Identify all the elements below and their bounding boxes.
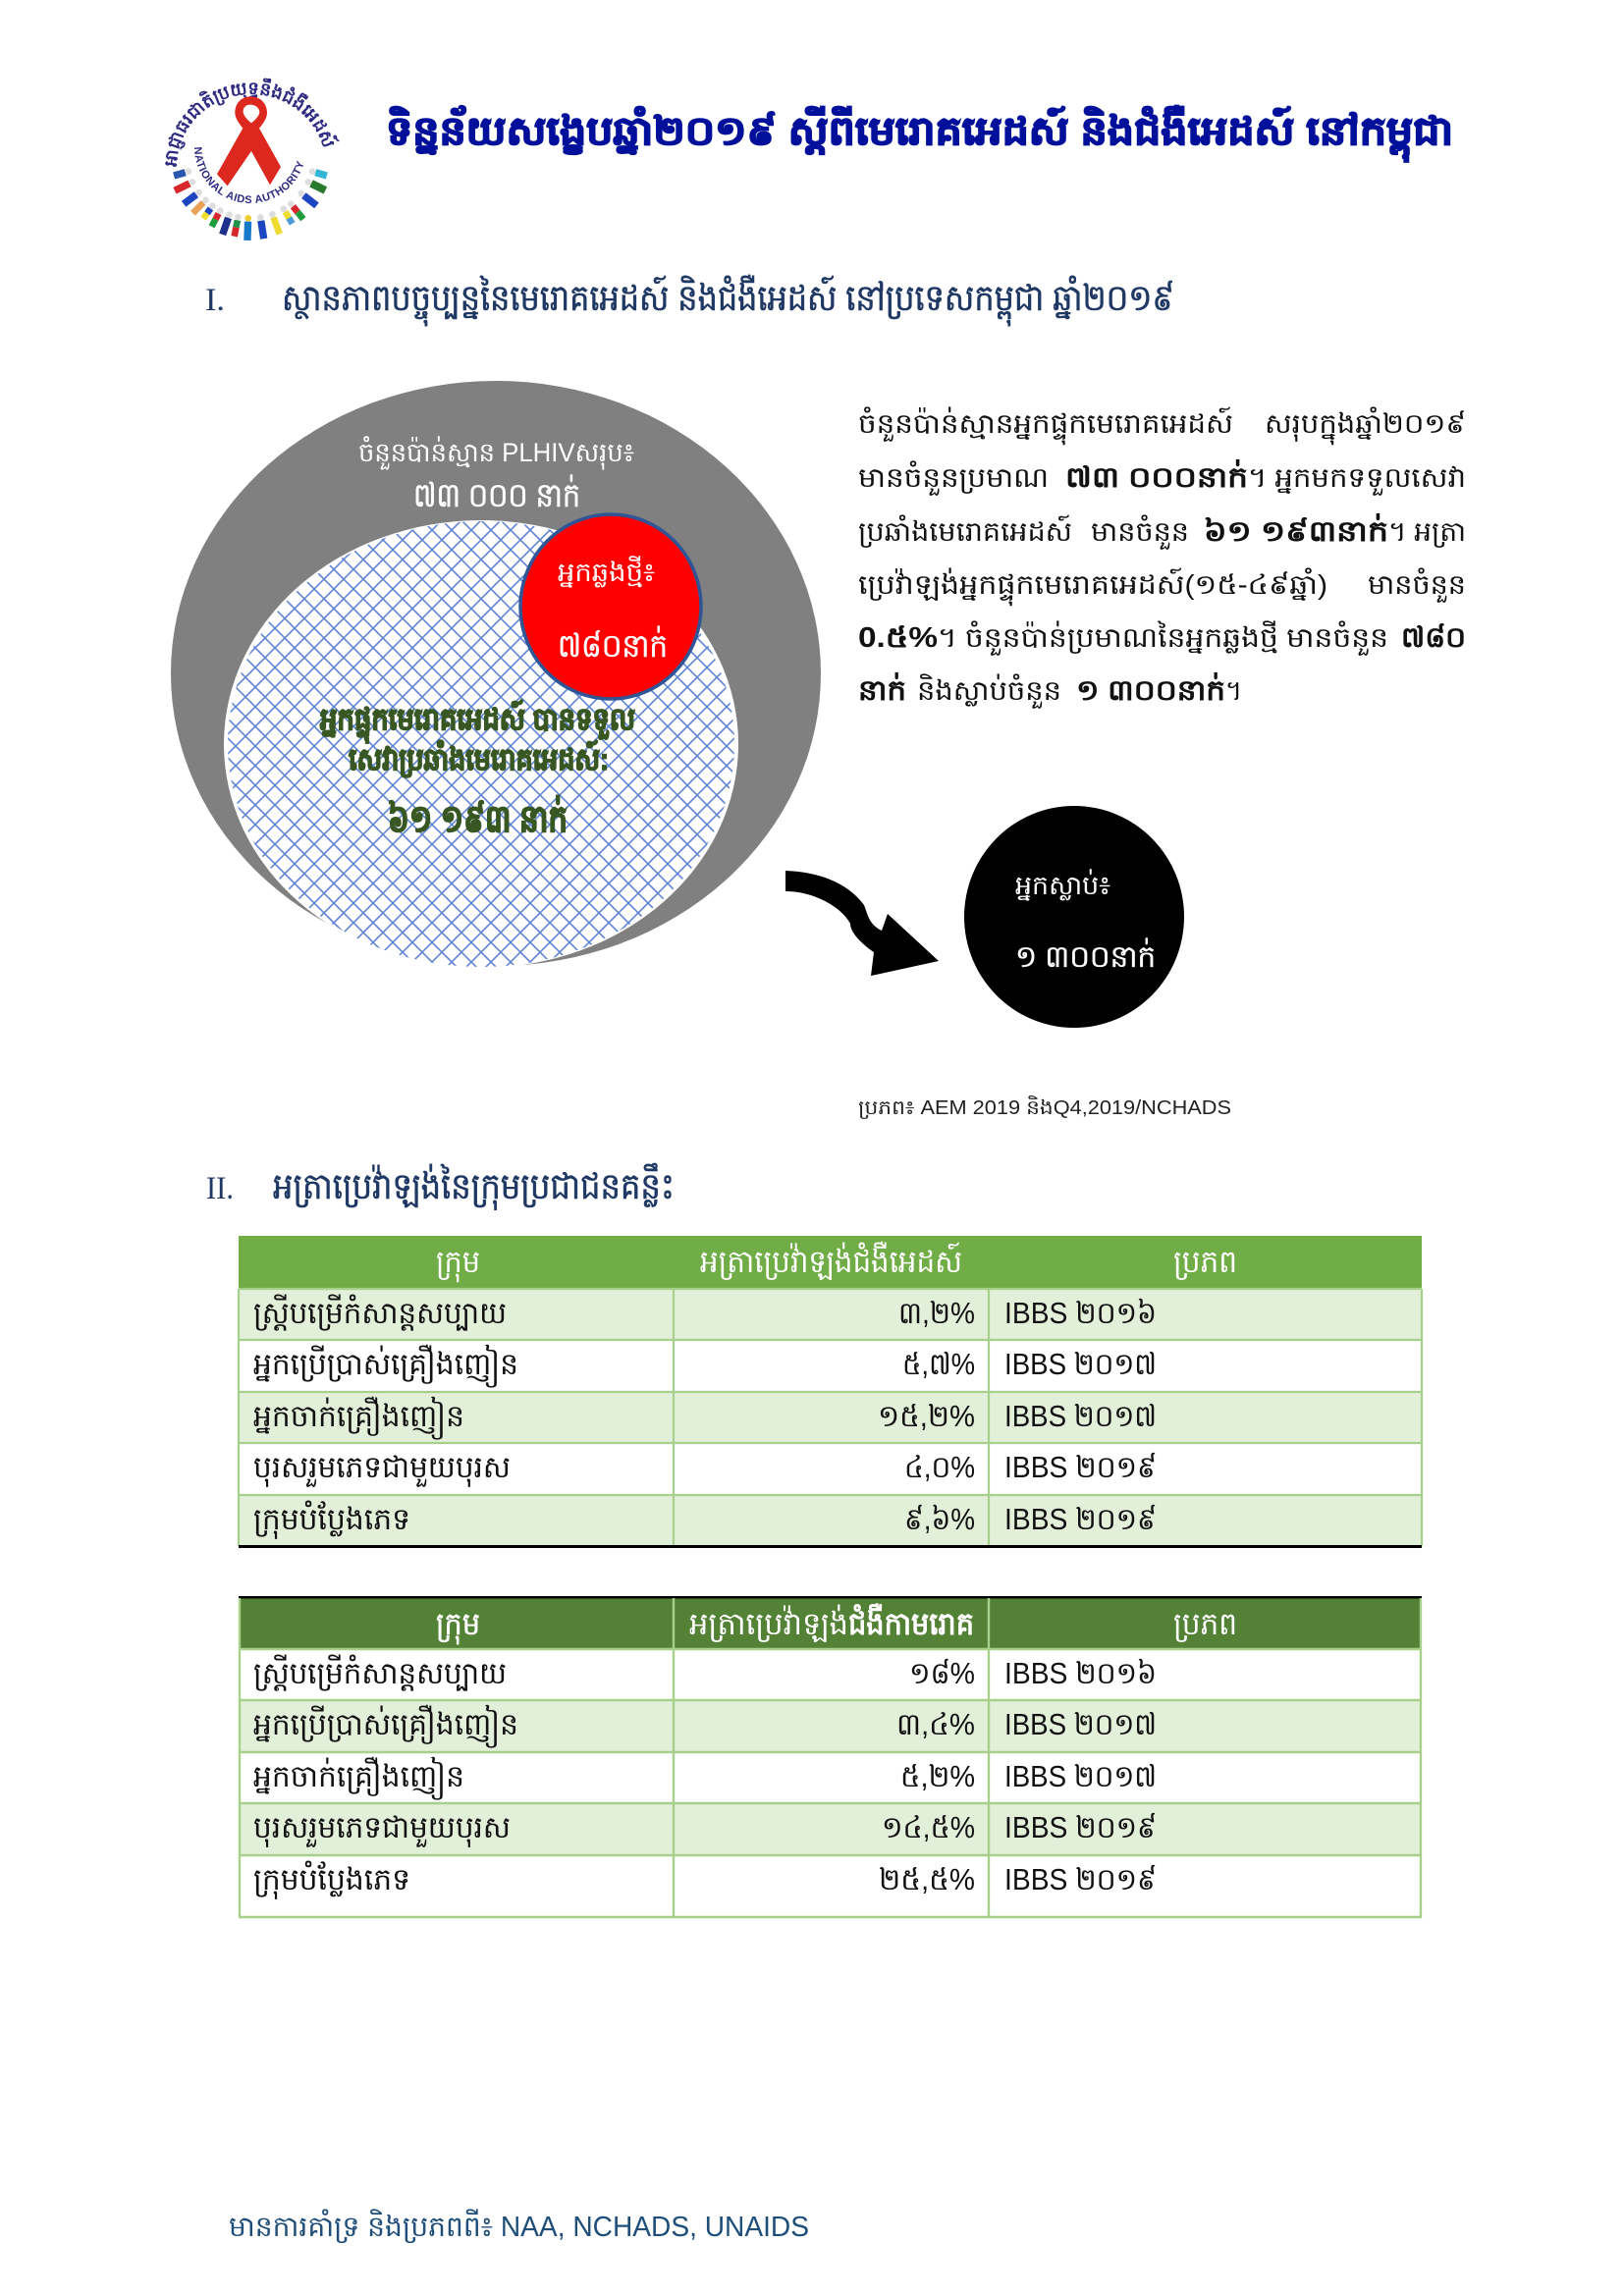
table 1 header: [239, 1236, 1422, 1289]
table 2 row 5: [253, 1860, 1157, 1899]
table 2 row 3: អ្នកចាក់គ្រឿងញៀន: [253, 1756, 464, 1800]
paragraph: ។ អត្រា: [1388, 516, 1466, 548]
table 2 header: ជំងឺកាមរោគ: [848, 1603, 974, 1641]
table: STI prevalence: [239, 1596, 1422, 1917]
paragraph: [858, 406, 1466, 709]
heading: section II: [206, 1162, 675, 1210]
table 1 row 4: [253, 1450, 1157, 1487]
table 2 row 3: [253, 1756, 1157, 1800]
table 2 grid: [239, 1598, 1422, 1917]
table 2 row 5: IBBS ២០១៩: [1004, 1862, 1157, 1896]
logo figures: [173, 167, 328, 240]
table 2 row 2: IBBS ២០១៧: [1004, 1707, 1157, 1741]
treatment label: ៦១ ១៩៣ នាក់: [388, 795, 568, 840]
title: ទិន្នន័យសង្ខេបឆ្នាំ២០១៩ ស្តីពីមេរោគអេដស៍ និងជំងឺអេដស៍ នៅកម្ពុជា: [386, 105, 1453, 163]
arrow: [785, 871, 939, 976]
table 2 row 2: [253, 1704, 1157, 1748]
table 2 row 3: IBBS ២០១៧: [1004, 1759, 1157, 1793]
heading: section II: អត្រាប្រេវ៉ាឡង់នៃក្រុមប្រជាជនគន្លឹះ: [273, 1162, 675, 1210]
table 1 row 2: អ្នកប្រើប្រាស់គ្រឿងញៀន: [253, 1344, 518, 1388]
paragraph: សរុបក្នុងឆ្នាំ២០១៩: [1265, 406, 1466, 446]
table 1 row 2: ៥,៧%: [902, 1347, 975, 1381]
red circle: new infections: អ្នកឆ្លងថ្មី៖: [558, 556, 655, 588]
chart: nested circles: [171, 381, 821, 968]
logo red ribbon: [217, 96, 281, 186]
table 2 row 2: ៣,៤%: [896, 1707, 975, 1741]
logo Khmer arc text: អាជ្ញាធរជាតិប្រយុទ្ធនឹងជំងឺអេដស៍: [165, 79, 340, 167]
table 1 header: អត្រាប្រេវ៉ាឡង់ជំងឺអេដស៍: [700, 1241, 962, 1280]
table 2 row 2: អ្នកប្រើប្រាស់គ្រឿងញៀន: [253, 1704, 518, 1748]
logo English arc text: NATIONAL AIDS AUTHORITY: [194, 147, 303, 204]
table 1 row 2: [253, 1344, 1157, 1388]
paragraph: មានចំនួន: [1368, 567, 1466, 603]
table 2 header: អត្រាប្រេវ៉ាឡង់: [689, 1604, 848, 1642]
table 2 row 5: ២៥,៥%: [879, 1862, 975, 1896]
table 2 row 1: ស្ត្រីបម្រើកំសាន្តសប្បាយ: [253, 1654, 507, 1691]
table 2 row bands: [239, 1700, 1422, 1855]
table 1 row 3: ១៥,២%: [878, 1399, 975, 1433]
paragraph: ១ ៣០០នាក់: [1076, 671, 1225, 707]
paragraph: មានចំនួន: [1091, 514, 1189, 550]
treatment label: សេវាប្រឆាំងមេរោគអេដស៍:: [349, 739, 609, 778]
icon: National AIDS Authority logo: [165, 79, 340, 240]
treatment label: [320, 699, 635, 840]
table 1 grid: [239, 1289, 1422, 1546]
table 1 row 5: [253, 1500, 1157, 1539]
heading: section I: ស្ថានភាពបច្ចុប្បន្ននៃមេរោគអេដស៍ និងជំងឺអេដស៍ នៅប្រទេសកម្ពុជា ឆ្នាំ២០១៩: [282, 274, 1174, 327]
inner hatched circle: on treatment: [228, 521, 734, 967]
table 1 row bands: [239, 1289, 1422, 1546]
table 1 row 4: ៤,០%: [904, 1450, 975, 1484]
table 2 header: ក្រុម: [436, 1606, 480, 1645]
red circle: new infections: [520, 514, 701, 699]
heading: section I: I.: [205, 283, 225, 318]
paragraph: មានចំនួនប្រមាណ: [858, 460, 1049, 496]
outer circle label: [358, 436, 634, 514]
table 2 row 1: [253, 1654, 1157, 1691]
table 2 row 1: IBBS ២០១៦: [1004, 1656, 1157, 1690]
paragraph: ប្រឆាំងមេរោគអេដស៍: [858, 514, 1072, 548]
outer grey circle: estimated PLHIV: [171, 381, 821, 966]
paragraph: ៧៣ ០០០នាក់: [1065, 458, 1248, 494]
paragraph: ៧៨០: [1401, 622, 1466, 654]
table 2 header: [239, 1596, 1422, 1649]
paragraph: 0.៥%: [858, 622, 938, 654]
table 1 row 3: អ្នកចាក់គ្រឿងញៀន: [253, 1396, 464, 1440]
table 2 row 3: ៥,២%: [900, 1759, 975, 1793]
footer: support and sources: មានការគាំទ្រ និងប្រភពពី៖ NAA, NCHADS, UNAIDS: [229, 2209, 809, 2244]
table 1 row 4: IBBS ២០១៩: [1004, 1450, 1157, 1484]
table 1 row 1: ៣,២%: [898, 1296, 975, 1330]
table 1 row 1: [253, 1294, 1157, 1331]
paragraph: និងស្លាប់ចំនួន: [917, 673, 1061, 709]
table 1 header: ប្រភព: [1173, 1244, 1237, 1280]
heading: section I: [205, 274, 1174, 327]
paragraph: ។ ចំនួនប៉ាន់ប្រមាណនៃអ្នកឆ្លងថ្មី មានចំនួន: [938, 620, 1388, 656]
table 1 row 2: IBBS ២០១៧: [1004, 1347, 1157, 1381]
table 2 row 5: ក្រុមបំប្លែងភេទ: [253, 1860, 410, 1899]
table 1 row 4: បុរសរួមភេទជាមួយបុរស: [253, 1450, 511, 1487]
table 2 row 4: IBBS ២០១៩: [1004, 1810, 1157, 1844]
heading: section II: II.: [206, 1171, 234, 1206]
black circle: deaths: [964, 806, 1184, 1028]
paragraph: ប្រេវ៉ាឡង់អ្នកផ្ទុកមេរោគអេដស៍(១៥-៤៩ឆ្នាំ): [858, 567, 1327, 607]
table 1 row 5: IBBS ២០១៩: [1004, 1502, 1157, 1536]
black circle: deaths: អ្នកស្លាប់៖: [1015, 869, 1110, 901]
table 2 row 4: [253, 1810, 1157, 1847]
table 1 row 5: ៩,៦%: [904, 1502, 975, 1536]
table 2 header: ប្រភព: [1173, 1606, 1237, 1642]
table 1 row 1: ស្ត្រីបម្រើកំសាន្តសប្បាយ: [253, 1294, 507, 1331]
paragraph: ចំនួនប៉ាន់ស្មានអ្នកផ្ទុកមេរោគអេដស៍: [858, 406, 1233, 446]
table: HIV prevalence: [239, 1236, 1422, 1548]
table 2 row 1: ១៨%: [909, 1656, 975, 1690]
treatment label: អ្នកផ្ទុកមេរោគអេដស៍ បានទទួល: [320, 699, 635, 744]
paragraph: នាក់: [858, 671, 906, 707]
source note: ប្រភព៖ AEM 2019 និងQ4,2019/NCHADS: [858, 1095, 1231, 1119]
red circle: new infections: ៧៨០នាក់: [558, 625, 668, 664]
black circle: deaths: ១ ៣០០នាក់: [1015, 937, 1156, 974]
table 1 row 5: ក្រុមបំប្លែងភេទ: [253, 1500, 410, 1539]
table 1 row 3: IBBS ២០១៧: [1004, 1399, 1157, 1433]
paragraph: ។ អ្នកមកទទួលសេវា: [1248, 462, 1466, 496]
paragraph: ៦១ ១៩៣នាក់: [1204, 512, 1388, 548]
table 2 row 4: បុរសរួមភេទជាមួយបុរស: [253, 1810, 511, 1847]
outer circle label: ៧៣ ០០០ នាក់: [413, 474, 580, 514]
table 2 row 4: ១៤,៥%: [882, 1810, 975, 1844]
table 1 row 3: [253, 1396, 1157, 1440]
table 1 row 1: IBBS ២០១៦: [1004, 1296, 1157, 1330]
outer circle label: ចំនួនប៉ាន់ស្មាន PLHIVសរុប៖: [358, 436, 634, 470]
table 1 header: ក្រុម: [436, 1244, 480, 1283]
white ring behind the inner circle: [224, 520, 738, 968]
paragraph: ។: [1225, 675, 1242, 706]
